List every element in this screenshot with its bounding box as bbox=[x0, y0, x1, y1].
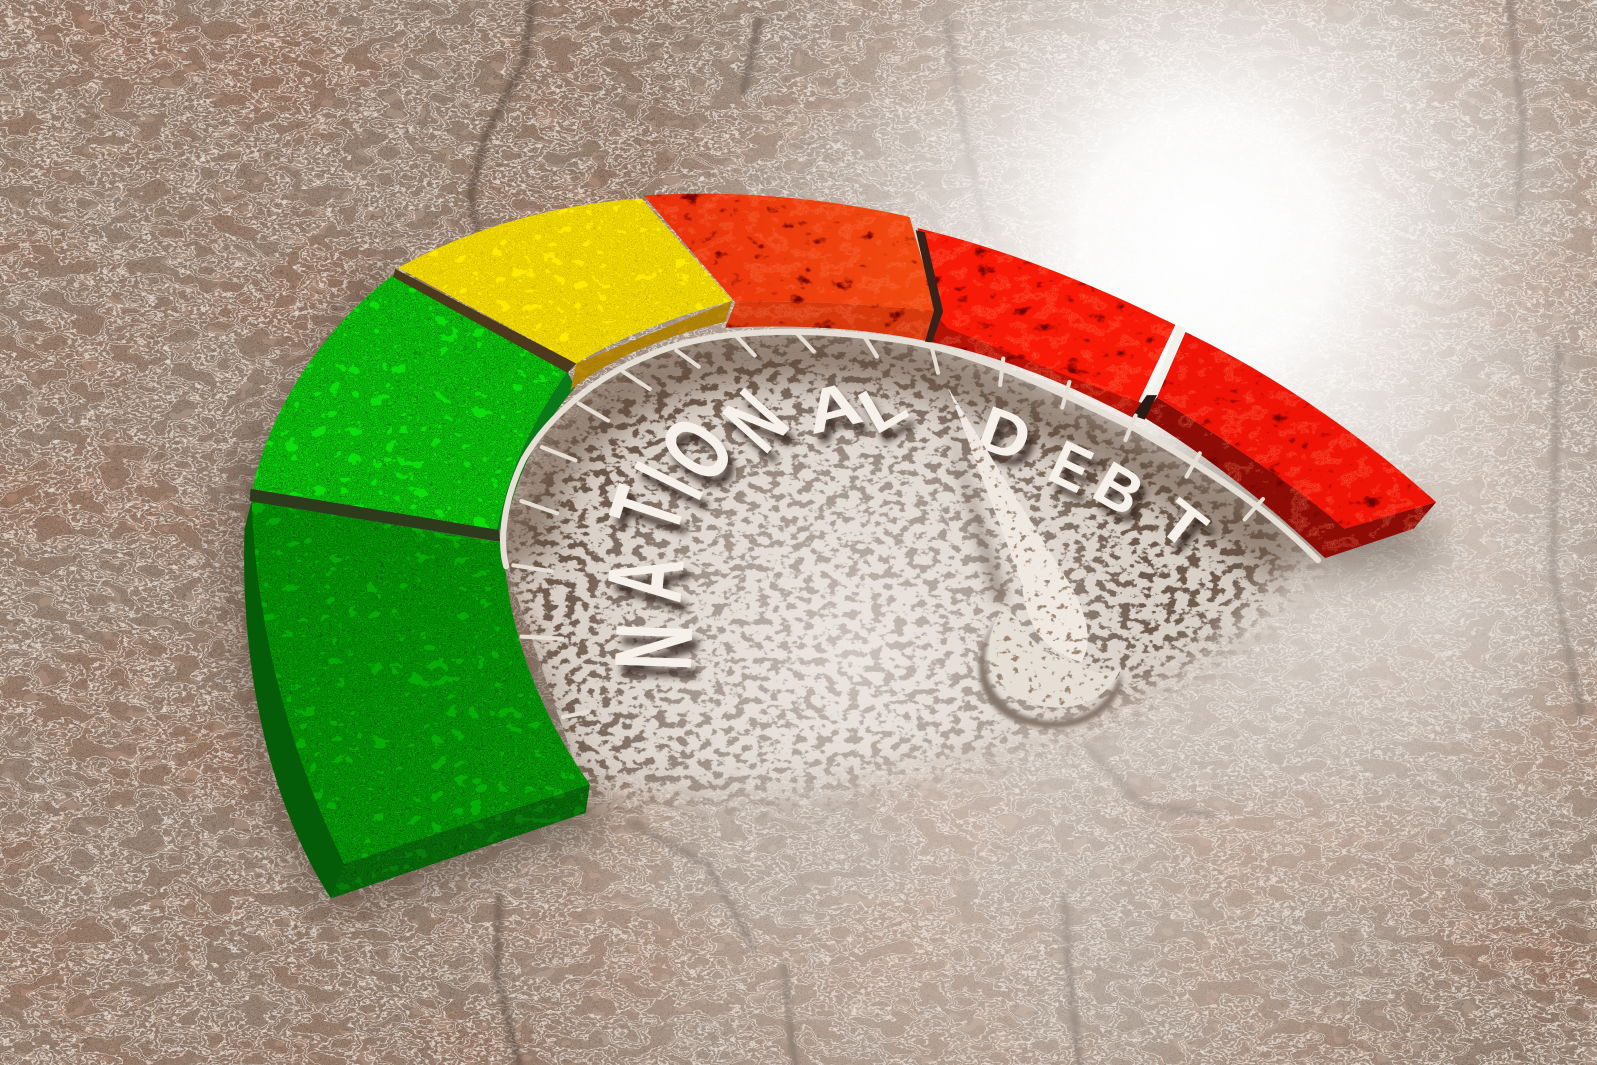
dial face bbox=[506, 334, 1326, 826]
label: NATIONAL: O bbox=[640, 399, 755, 500]
green inner side bbox=[497, 372, 575, 530]
label: NATIONAL: N bbox=[592, 621, 717, 673]
label: NATIONAL bbox=[585, 365, 918, 673]
rim bbox=[503, 332, 1318, 566]
divider: green yellow gap bbox=[393, 269, 576, 373]
segment: yellow bbox=[398, 199, 732, 390]
dial rim and tick marks bbox=[503, 332, 1318, 717]
label: NATIONAL: A bbox=[585, 552, 707, 606]
label: NATIONAL: A bbox=[798, 367, 869, 447]
national debt gauge band bbox=[244, 194, 1436, 898]
ticks bbox=[513, 333, 1263, 717]
label: DEBT: T bbox=[1147, 487, 1218, 562]
label: NATIONAL: L bbox=[847, 365, 918, 447]
label: NATIONAL: T bbox=[588, 476, 707, 544]
label: DEBT: D bbox=[969, 393, 1040, 476]
segment: orange bbox=[644, 194, 937, 342]
label: NATIONAL: N bbox=[705, 372, 806, 469]
label: DEBT bbox=[969, 393, 1218, 562]
label: NATIONAL: I bbox=[611, 447, 725, 513]
label: DEBT: E bbox=[1039, 426, 1103, 506]
needle hub bbox=[979, 607, 1121, 728]
needle pointer bbox=[942, 388, 1088, 662]
label: DEBT: B bbox=[1083, 448, 1155, 529]
segment: red outer bbox=[1143, 332, 1436, 558]
divider: green gap bbox=[250, 489, 500, 542]
segment: lower green bbox=[244, 501, 590, 898]
gauge cast shadow bbox=[232, 255, 1446, 917]
segment: red middle bbox=[916, 228, 1175, 418]
segment: upper green bbox=[253, 275, 567, 530]
divider: red gap bbox=[1133, 325, 1186, 420]
